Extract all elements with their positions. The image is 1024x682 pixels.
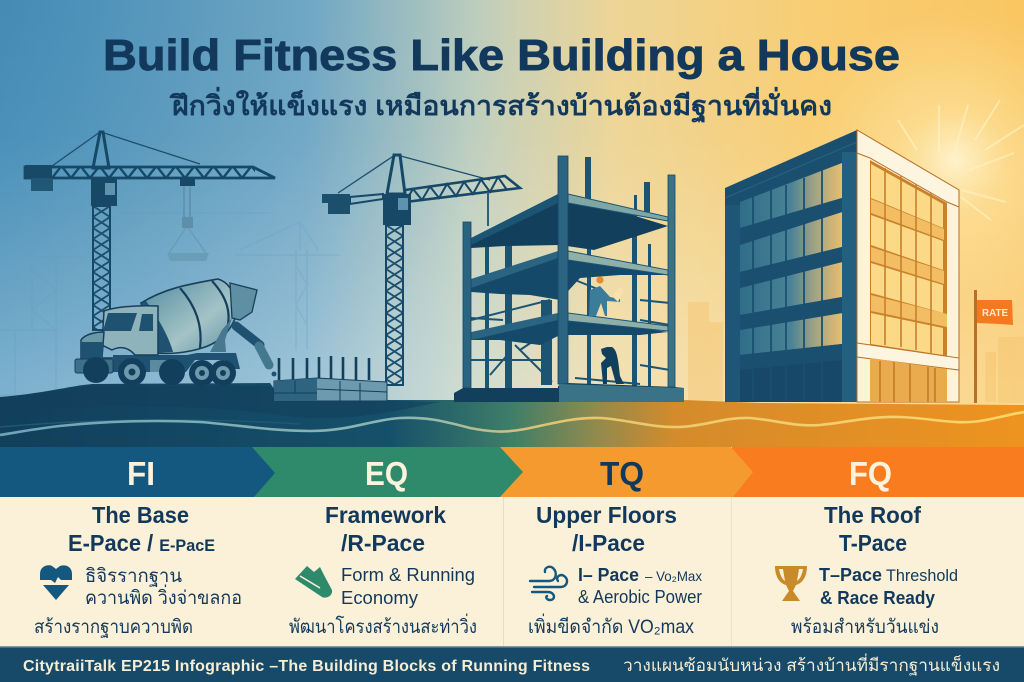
cab <box>102 306 158 355</box>
chevron: FQ <box>732 447 1024 497</box>
chevron: FI <box>0 447 275 497</box>
column: Upper Floors: – Vo₂Max <box>645 568 702 584</box>
concrete mixer truck <box>75 279 276 386</box>
flag with RATE: RATE <box>982 307 1008 319</box>
icon: wind <box>530 567 567 600</box>
icon: mixer drum <box>141 279 237 353</box>
frame back columns <box>485 157 651 390</box>
column: The Roof <box>775 502 958 638</box>
wheels <box>83 357 109 383</box>
icon: running shoe <box>295 566 332 598</box>
Thai summary: เพิ่มขีดจำกัด VO₂max <box>528 613 694 638</box>
chevron: TQ <box>500 447 753 497</box>
heading: I-Pace: /I-Pace <box>572 530 645 556</box>
chevron: EQ <box>252 447 523 497</box>
race ready: & Race Ready <box>820 588 935 608</box>
floor slabs <box>471 194 558 245</box>
heading: Framework: Framework <box>325 502 446 528</box>
steel frame under construction <box>454 156 684 402</box>
icon: heart with pulse <box>40 565 72 600</box>
entrance glazing <box>870 358 947 402</box>
entrance band <box>857 343 959 370</box>
chute <box>230 283 257 320</box>
finished office building <box>725 130 959 402</box>
chevron: FI: FI <box>127 455 155 492</box>
crane left <box>25 132 275 330</box>
worker upper <box>589 276 623 316</box>
heading: R-Pace: /R-Pace <box>341 530 425 556</box>
footer Thai tagline: วางแผนซ้อมนับหน่วง สร้างบ้านที่มีรากฐานแข็งแรง <box>623 653 1000 676</box>
right windows <box>870 160 947 358</box>
column: Framework: Economy <box>341 588 418 608</box>
column: Framework <box>289 502 477 638</box>
foundation with rebar <box>274 356 387 401</box>
sun rays <box>898 100 1024 220</box>
dark floor undersides <box>471 193 668 250</box>
faint distant cranes and city <box>0 213 340 395</box>
worker lower <box>601 347 624 384</box>
heading: The Base: The Base <box>92 502 189 528</box>
bracing lines <box>471 280 670 384</box>
chevron: TQ: TQ <box>600 455 644 492</box>
right facade <box>857 130 959 402</box>
right spandrels <box>871 199 947 327</box>
footer bar <box>0 646 1024 682</box>
Thai summary: พร้อมสำหรับวันแข่ง <box>791 617 939 638</box>
footer title: CitytraiiTalk EP215 Infographic –The Building Blocks of Running Fitness <box>23 658 590 675</box>
heading: T-Pace: T-Pace <box>839 530 907 556</box>
chevron: EQ: EQ <box>365 455 408 492</box>
T-Pace threshold: T–Pace <box>819 565 882 585</box>
ground <box>0 383 1024 447</box>
Thai summary: พัฒนาโครงสร้างนสะท่าวิ่ง <box>289 613 477 638</box>
title: Build Fitness Like Building a House <box>103 31 900 80</box>
Thai description line 1: ธิจิรรากฐาน <box>85 566 182 587</box>
column: The Base <box>34 502 242 638</box>
dark strip above chevrons <box>0 444 1024 447</box>
left window bands <box>740 163 842 355</box>
heading: Upper Floors: Upper Floors <box>536 502 677 528</box>
column: Upper Floors <box>528 502 702 638</box>
faint warm city silhouettes <box>688 302 1024 403</box>
aerobic power: & Aerobic Power <box>578 587 702 607</box>
left facade <box>725 130 857 402</box>
Thai subtitle: ฝึกวิ่งให้แข็งแรง เหมือนการสร้างบ้านต้องมีฐานที่มั่นคง <box>169 86 832 124</box>
cream panel <box>0 497 1024 646</box>
base slab <box>454 383 684 402</box>
left mullions <box>753 170 822 400</box>
main columns <box>463 222 471 388</box>
flag with RATE <box>974 290 1013 403</box>
sky background <box>0 0 1024 447</box>
column: The Roof: Threshold <box>886 566 958 585</box>
icon: trophy <box>775 566 807 601</box>
chevron: FQ: FQ <box>849 455 892 492</box>
heading: The Roof: The Roof <box>824 502 921 528</box>
crane centre <box>322 155 520 385</box>
chassis <box>113 353 240 372</box>
discharge pipe <box>236 326 260 345</box>
I-Pace VO2max: I– Pace <box>578 565 639 585</box>
hood <box>81 332 113 358</box>
form and running economy: Form & Running <box>341 565 475 585</box>
heading: E-Pace: E-Pace / E-PacE <box>68 530 215 556</box>
Thai summary: สร้างรากฐาบควาบพิด <box>34 617 193 638</box>
Thai description line 2: ควานพิด วิ่งจ่าขลกอ <box>85 584 242 609</box>
